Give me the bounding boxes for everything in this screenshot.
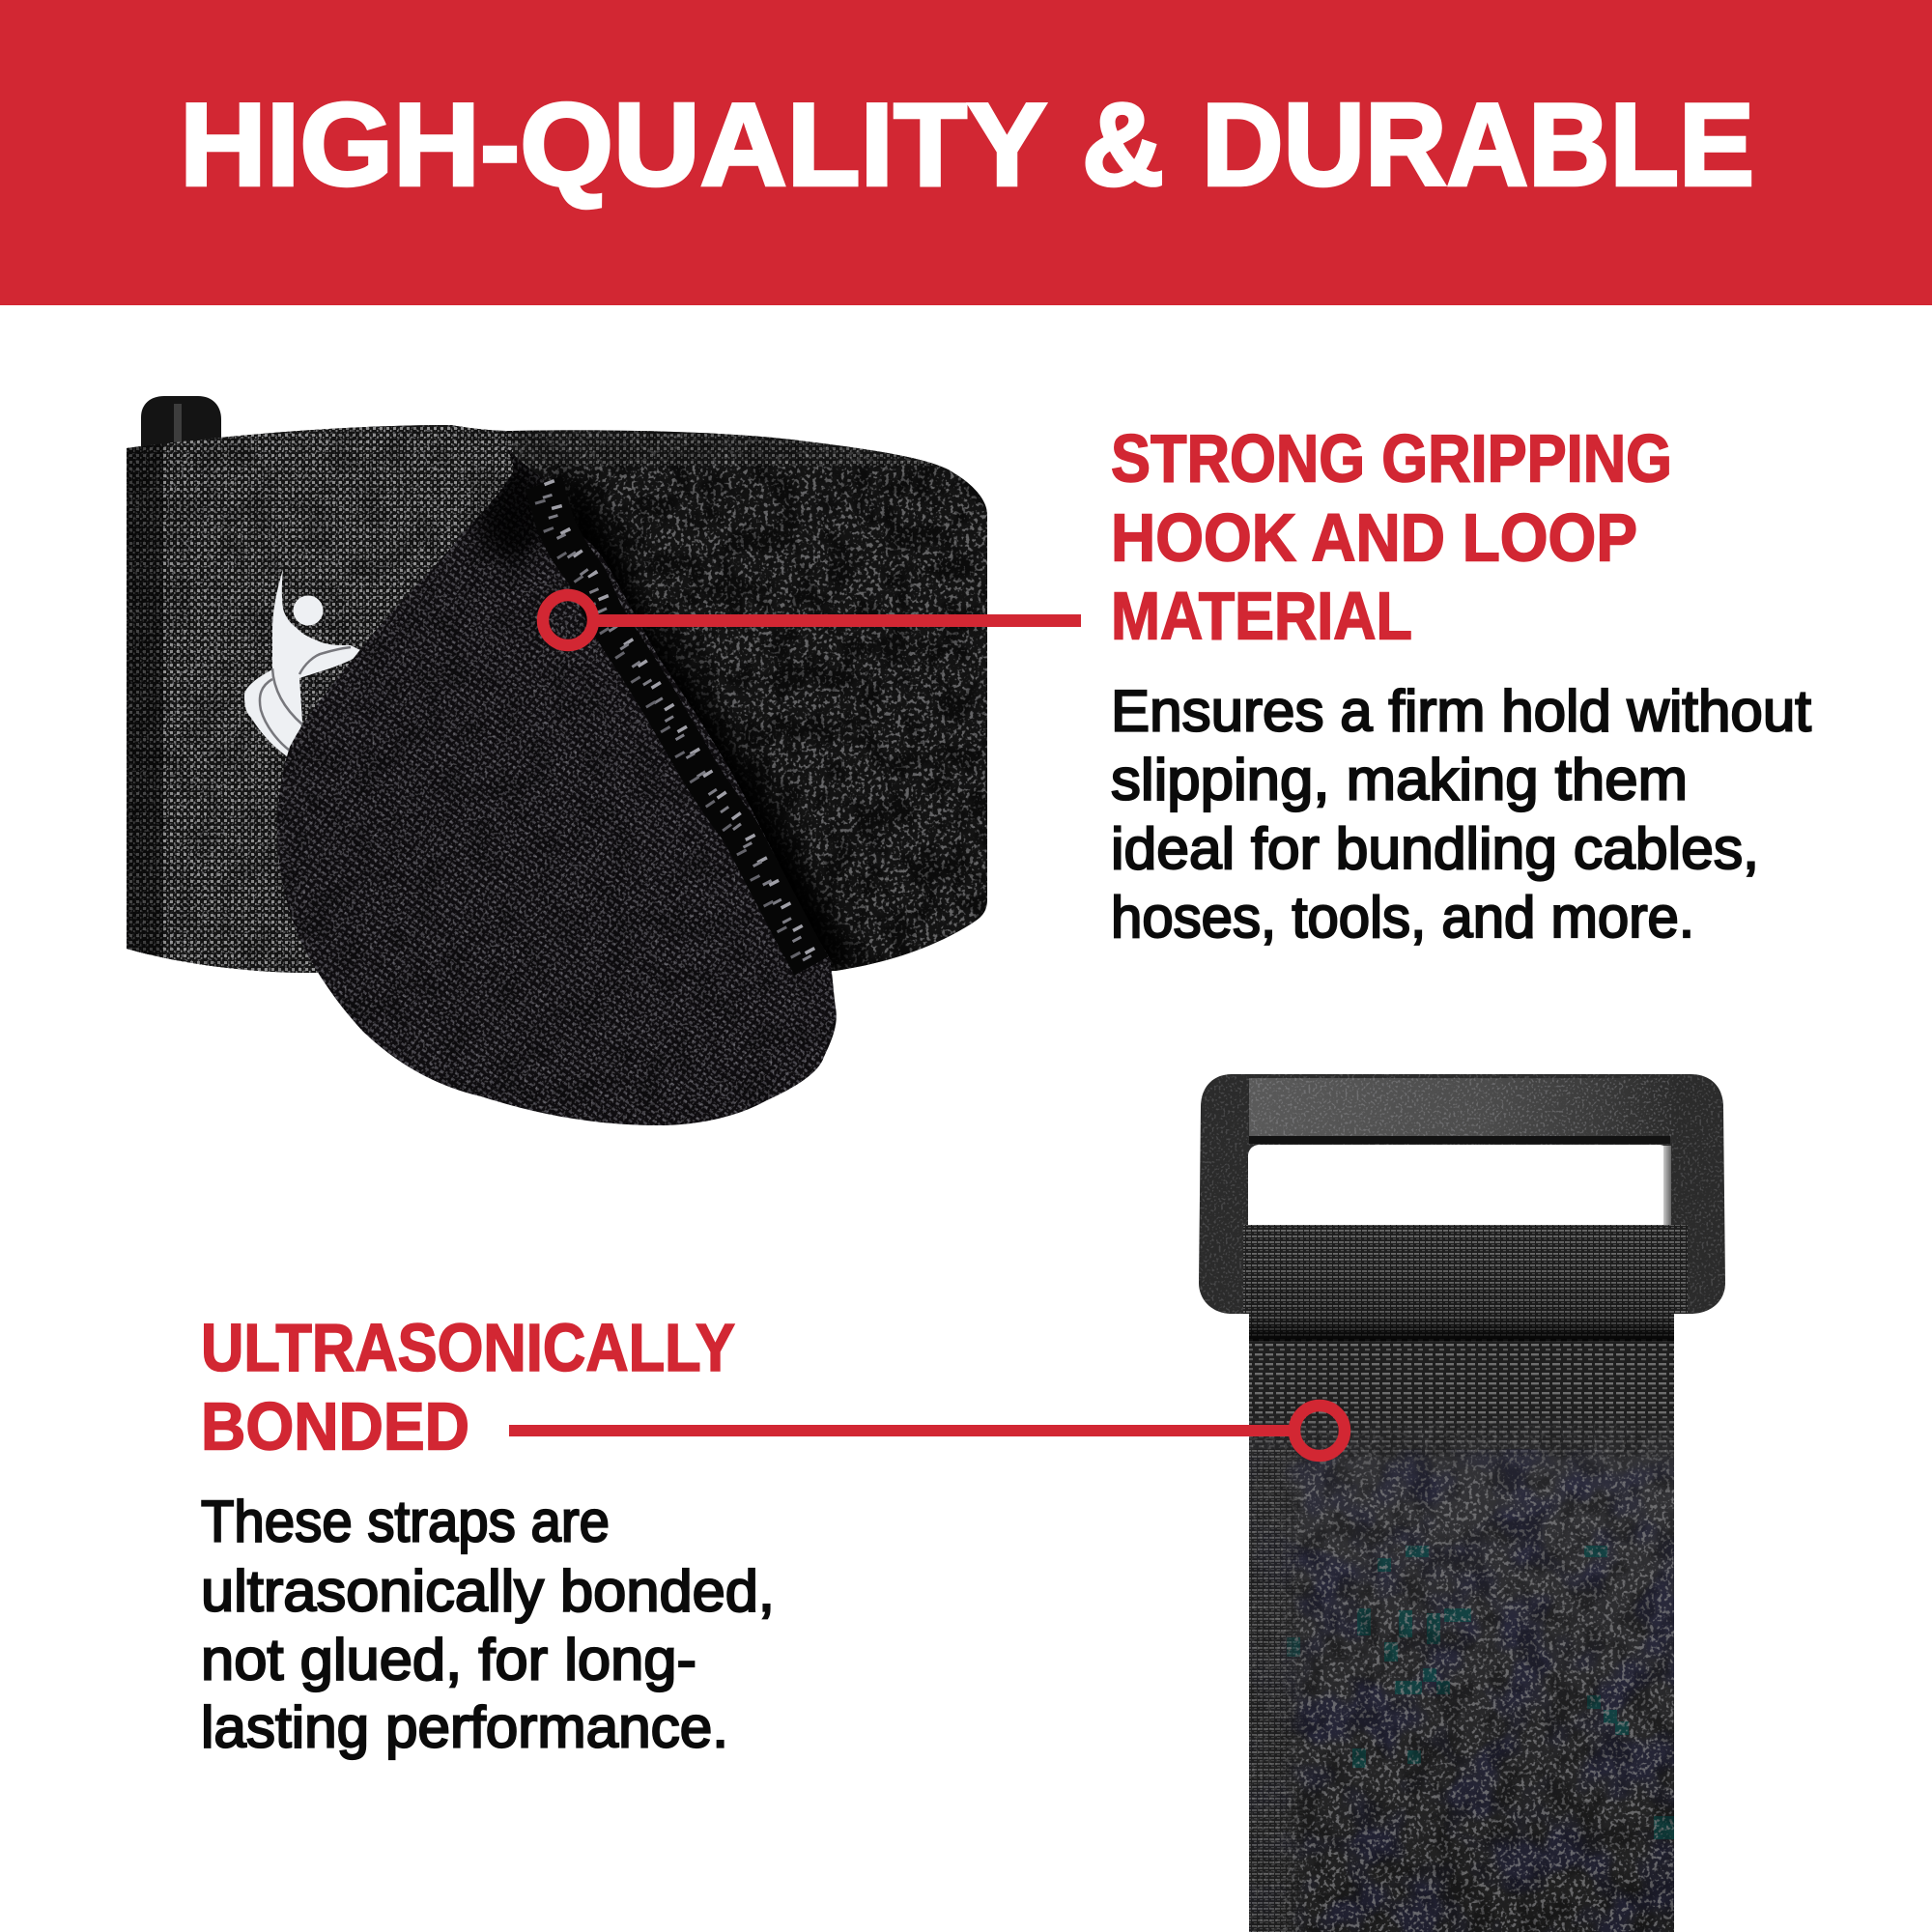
body copy: ultrasonically bonded, <box>201 1559 775 1623</box>
callout marker: hook material <box>543 595 1081 645</box>
product photo: strap with buckle <box>1199 1074 1726 1932</box>
pin behind the roll <box>141 396 221 446</box>
heading: HOOK AND LOOP <box>1111 500 1637 576</box>
text block: strong gripping <box>1111 421 1811 950</box>
heading: BONDED <box>201 1389 469 1464</box>
heading: STRONG GRIPPING <box>1111 421 1672 497</box>
title <box>180 79 1754 211</box>
body copy: not glued, for long- <box>201 1627 696 1692</box>
strap fold over the buckle <box>1243 1225 1688 1341</box>
text block: ultrasonically bonded <box>201 1310 775 1760</box>
body copy: Ensures a firm hold without <box>1111 678 1811 744</box>
buckle top bar <box>1249 1078 1674 1144</box>
body copy: lasting performance. <box>201 1694 728 1760</box>
body copy: These straps are <box>201 1490 610 1553</box>
leader line <box>597 614 1081 627</box>
hook edge of the flap <box>535 481 817 970</box>
body copy <box>1111 678 1811 950</box>
buckle <box>1199 1074 1726 1316</box>
leader line <box>509 1425 1292 1436</box>
ring <box>1294 1406 1345 1456</box>
banner <box>0 0 1932 305</box>
body copy: ideal for bundling cables, <box>1111 816 1759 881</box>
title: HIGH-QUALITY <box>180 79 1047 211</box>
title: & <box>1082 79 1164 211</box>
rolled strap body <box>116 415 1005 985</box>
body copy: hoses, tools, and more. <box>1111 885 1694 950</box>
folded flap <box>270 440 850 1135</box>
heading <box>1111 421 1672 653</box>
product photo: rolled hook and loop strap <box>116 396 1005 1135</box>
title: DURABLE <box>1202 79 1754 211</box>
shadow beside the flap <box>555 464 860 976</box>
strap body <box>1249 1309 1674 1932</box>
white logo on strap <box>244 569 364 758</box>
teal pixel blocks <box>1287 1546 1674 1839</box>
heading: MATERIAL <box>1111 578 1412 653</box>
callout marker: bonded seam <box>509 1406 1345 1456</box>
body copy <box>201 1490 775 1760</box>
heading: ULTRASONICALLY <box>201 1310 735 1385</box>
ring <box>543 595 593 645</box>
body copy: slipping, making them <box>1111 748 1688 811</box>
heading <box>201 1310 735 1464</box>
